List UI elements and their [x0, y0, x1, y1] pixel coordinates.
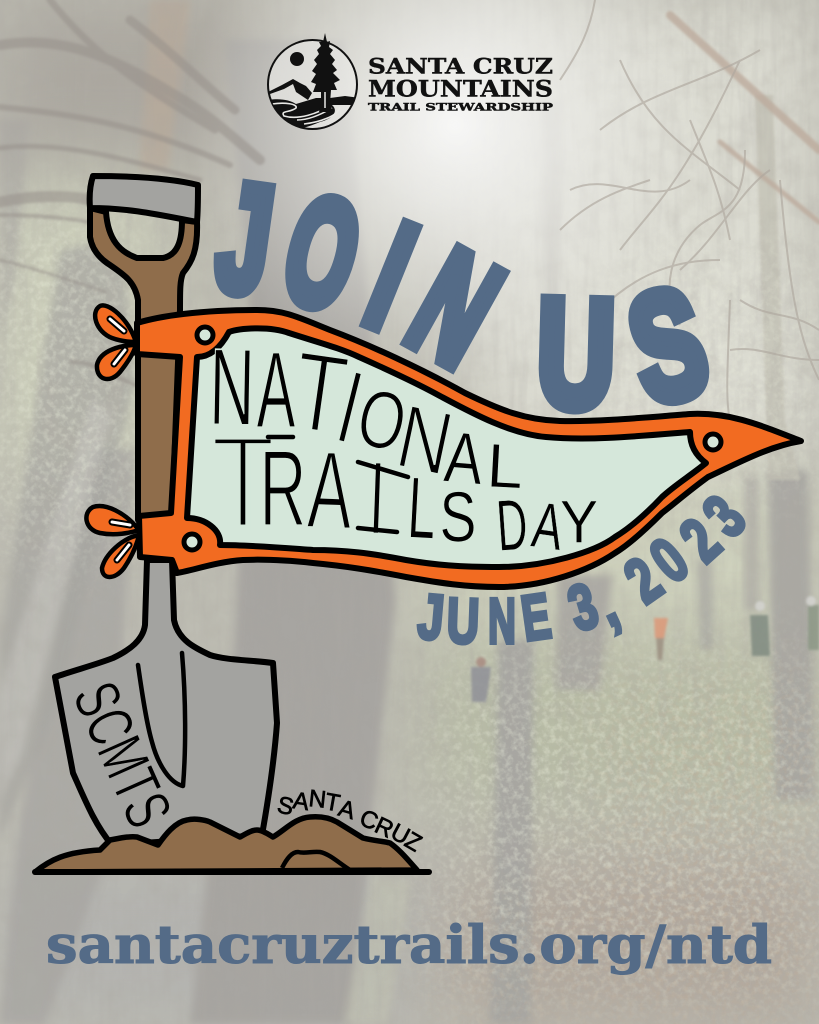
pennant lettering: National Trails Day: A — [257, 329, 296, 451]
logo emblem — [268, 33, 360, 129]
logo wordmark — [368, 54, 553, 114]
pennant lettering: National Trails Day: S — [440, 479, 476, 557]
pennant lettering: National Trails Day: R — [260, 428, 306, 550]
trunk on the right — [755, 95, 800, 480]
shovel engraving: SCMTS: SCMTS — [59, 671, 186, 838]
dirt mound — [35, 817, 429, 872]
pennant mint field — [187, 328, 706, 567]
pennant orange border — [137, 310, 801, 587]
headline: JOIN US: J — [208, 151, 282, 326]
headline: JOIN US: I — [347, 192, 435, 359]
date: June 3, 2023: 2 — [667, 505, 733, 575]
pennant lettering: National Trails Day: L — [406, 460, 438, 558]
headline: JOIN US: S — [614, 254, 722, 437]
logo wordmark: TRAIL STEWARDSHIP — [368, 102, 553, 114]
pennant lettering: National Trails Day: A — [306, 429, 354, 553]
hand lettering: Santa Cruz: SANTA CRUZ — [275, 785, 426, 858]
pennant lettering: National Trails Day: T — [285, 328, 354, 459]
logo — [268, 33, 553, 129]
pennant lettering: National Trails Day: L — [485, 432, 525, 502]
logo wordmark: SANTA CRUZ — [368, 54, 553, 78]
illustration: shovel — [55, 176, 277, 845]
date: June 3, 2023 — [415, 482, 759, 658]
date: June 3, 2023: 3 — [689, 482, 759, 550]
shovel handle — [90, 176, 198, 520]
pennant lettering: National Trails Day — [209, 326, 598, 567]
date: June 3, 2023: 2 — [612, 544, 674, 617]
tree branches — [0, 0, 260, 385]
date: June 3, 2023: U — [446, 585, 480, 657]
date: June 3, 2023: 3 — [560, 569, 606, 645]
pennant flag — [137, 310, 801, 587]
pennant lettering: National Trails Day: A — [528, 487, 569, 564]
pennant lettering: National Trails Day: T — [210, 408, 276, 556]
date: June 3, 2023: E — [517, 581, 555, 655]
pennant lettering: National Trails Day: N — [389, 386, 461, 495]
pennant lettering: National Trails Day: O — [350, 371, 414, 470]
pennant lettering: National Trails Day: D — [494, 485, 530, 567]
pennant lettering: National Trails Day: I — [367, 441, 387, 556]
date: June 3, 2023: , — [585, 570, 628, 640]
headline: JOIN US — [208, 151, 722, 439]
date: June 3, 2023: J — [415, 581, 447, 654]
date: June 3, 2023: N — [488, 586, 516, 658]
pennant tie: lower — [86, 506, 139, 577]
date: June 3, 2023: 0 — [637, 524, 701, 596]
website URL: santacruztrails.org/ntd — [46, 915, 772, 976]
pennant grommets — [184, 327, 721, 550]
shovel blade — [55, 560, 277, 845]
pennant lettering: National Trails Day: A — [442, 416, 487, 500]
pennant tie: upper — [95, 305, 136, 379]
pennant lettering: National Trails Day: I — [328, 349, 372, 465]
hikers in the forest — [471, 596, 819, 702]
logo wordmark: MOUNTAINS — [368, 76, 553, 102]
pennant lettering: National Trails Day: Y — [560, 489, 598, 556]
pennant lettering: National Trails Day: N — [209, 326, 255, 448]
headline: JOIN US: O — [268, 162, 376, 344]
headline: JOIN US: N — [385, 218, 525, 398]
headline: JOIN US: U — [535, 267, 617, 439]
